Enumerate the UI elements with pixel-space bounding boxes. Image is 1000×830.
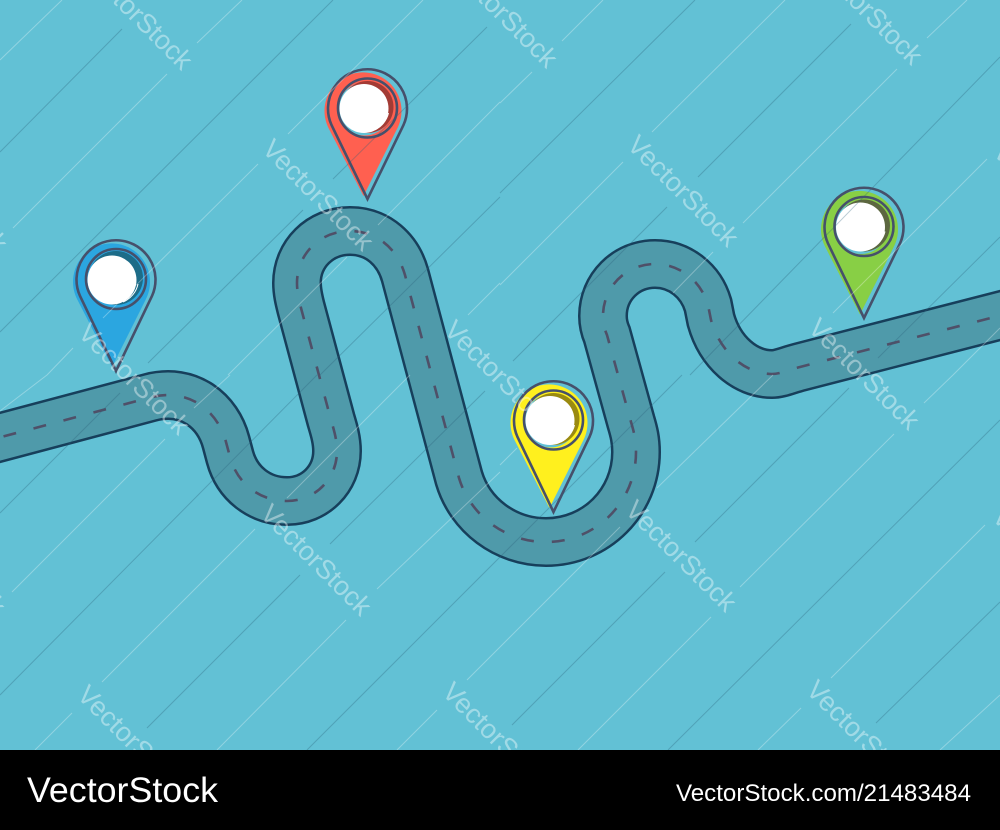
- pin: red: [324, 69, 407, 199]
- pin shadow crescent: [838, 200, 890, 252]
- watermark text tiles: VectorStock: [621, 129, 745, 253]
- footer image url: VectorStock.com/21483484: [676, 780, 971, 807]
- pin background gap: [338, 82, 391, 136]
- watermark text tiles: VectorStock: [800, 674, 924, 798]
- pin white disc: [836, 202, 885, 252]
- pin fill: [821, 191, 898, 314]
- watermark text tiles: VectorStock: [802, 312, 926, 436]
- watermark text tiles: VectorStock: [71, 679, 195, 803]
- road edge: [0, 231, 1000, 542]
- pin crescent highlight: [560, 425, 574, 442]
- pin: green: [821, 188, 904, 318]
- pin white disc: [88, 256, 136, 304]
- watermark text tiles: VectorStock: [256, 133, 380, 257]
- footer bar: [0, 750, 1000, 830]
- pin outline: [514, 381, 593, 512]
- pin background gap: [834, 201, 888, 254]
- pin inner ring: [338, 78, 397, 138]
- pin shadow crescent: [342, 81, 394, 133]
- footer brand name: VectorStock: [27, 771, 219, 810]
- winding road: [0, 231, 1000, 542]
- pin crescent highlight: [871, 232, 885, 248]
- road centre dashes: [0, 231, 1000, 542]
- pin shadow crescent: [89, 251, 143, 305]
- watermark text tiles: VectorStock: [72, 317, 196, 441]
- pin background gap: [524, 394, 577, 448]
- pin white disc: [340, 84, 388, 133]
- pin outline: [328, 69, 407, 199]
- pin fill: [73, 243, 150, 367]
- road surface: [0, 231, 1000, 542]
- pin white disc: [526, 396, 574, 445]
- watermark text tiles: VectorStock: [436, 676, 560, 800]
- pin inner ring: [86, 249, 146, 309]
- pin inner ring: [524, 390, 583, 450]
- watermark text tiles: VectorStock: [619, 494, 743, 618]
- pin: yellow: [510, 381, 593, 512]
- pin: blue: [73, 240, 156, 371]
- pin fill: [324, 72, 402, 196]
- watermark text tiles: VectorStock: [438, 314, 562, 438]
- pin outline: [76, 240, 156, 371]
- pin crescent highlight: [123, 284, 138, 302]
- pin shadow crescent: [528, 393, 580, 445]
- pin fill: [510, 384, 588, 508]
- pin inner ring: [834, 197, 894, 256]
- pin crescent highlight: [374, 113, 388, 130]
- watermark text tiles: VectorStock: [254, 498, 378, 622]
- pin outline: [824, 188, 904, 318]
